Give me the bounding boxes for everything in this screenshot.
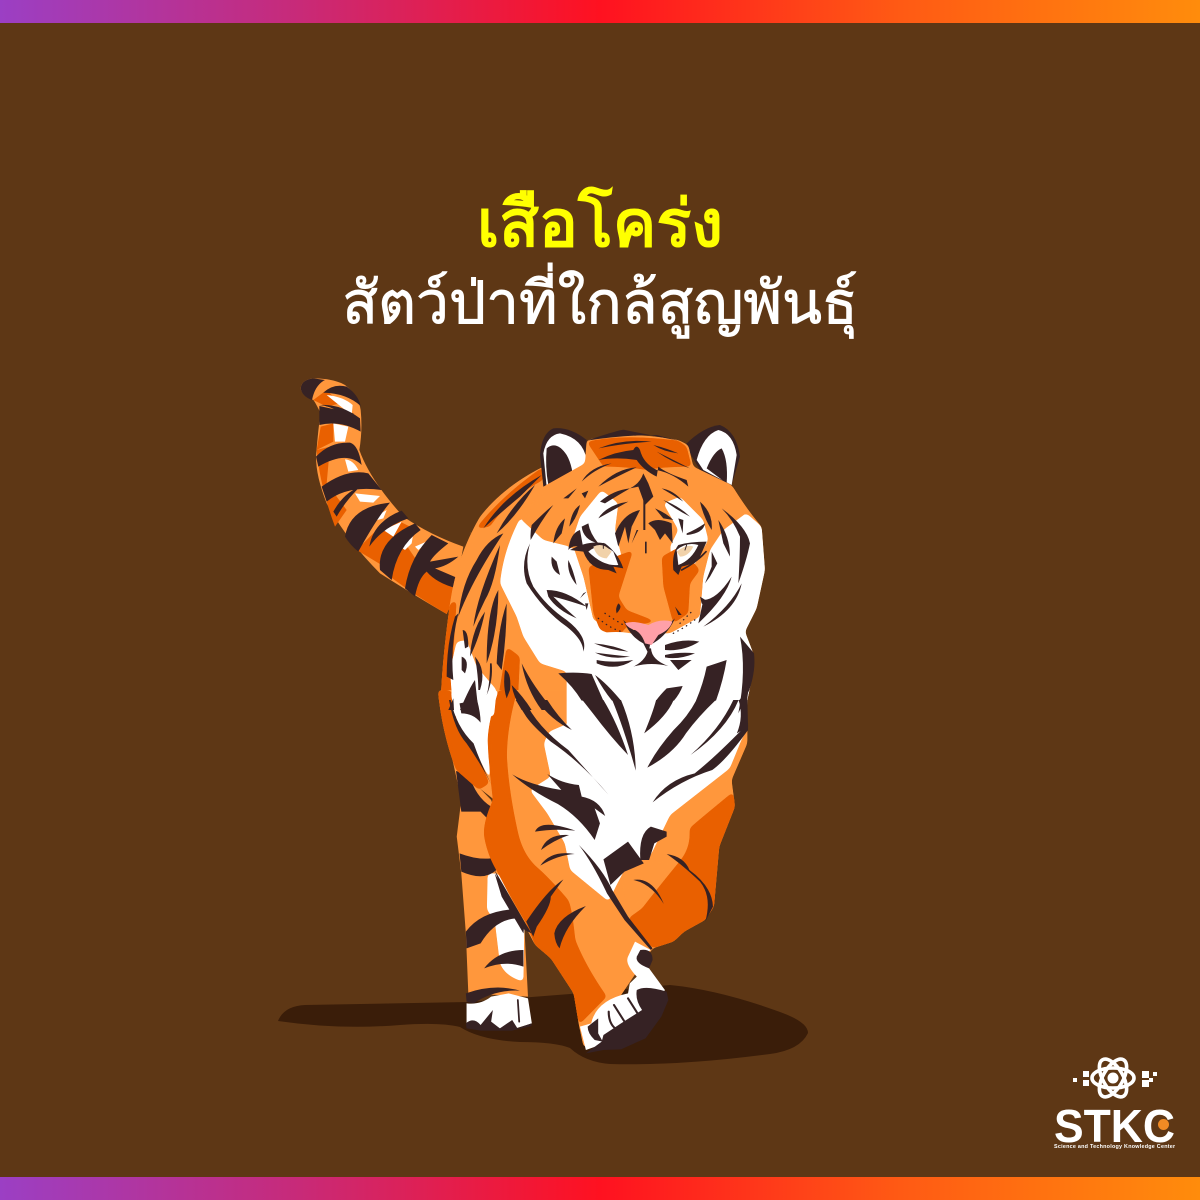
white eye patches <box>573 490 623 567</box>
front paw <box>580 942 668 1053</box>
cheek stripes left <box>530 505 553 540</box>
chest stripes <box>449 700 748 950</box>
logo orange dot <box>1158 1119 1169 1130</box>
cheek stripes right <box>718 520 730 557</box>
ground shadow <box>278 985 808 1064</box>
back stripes <box>447 475 748 710</box>
logo tagline: Science and Technology Knowledge Center <box>1054 1144 1175 1150</box>
left ear <box>540 428 587 487</box>
tiger torso <box>441 467 765 727</box>
forehead stripes <box>524 430 750 652</box>
head base <box>520 435 748 633</box>
top gradient bar <box>0 0 1200 23</box>
tail <box>301 378 463 614</box>
right ear <box>685 425 740 485</box>
white ruff and cheeks <box>450 513 765 727</box>
whisker pads <box>593 628 703 670</box>
right eye <box>677 544 698 565</box>
muzzle dark orange <box>588 550 657 637</box>
logo emblem <box>1073 1057 1157 1099</box>
nose <box>625 621 672 645</box>
left eye <box>588 547 618 565</box>
tiger head <box>520 425 750 670</box>
lower eye marks <box>590 552 706 570</box>
lower body and front leg <box>438 690 747 1050</box>
subtitle: สัตว์ป่าที่ใกล้สูญพันธุ์ <box>342 271 858 336</box>
muzzle freckles <box>598 612 697 633</box>
bottom gradient bar <box>0 1177 1200 1200</box>
eye outlines <box>570 542 623 573</box>
title: เสือโคร่ง <box>477 187 723 260</box>
whisker stripes <box>594 618 699 670</box>
logo: STKC <box>1054 1057 1176 1150</box>
back left leg <box>453 760 532 1031</box>
